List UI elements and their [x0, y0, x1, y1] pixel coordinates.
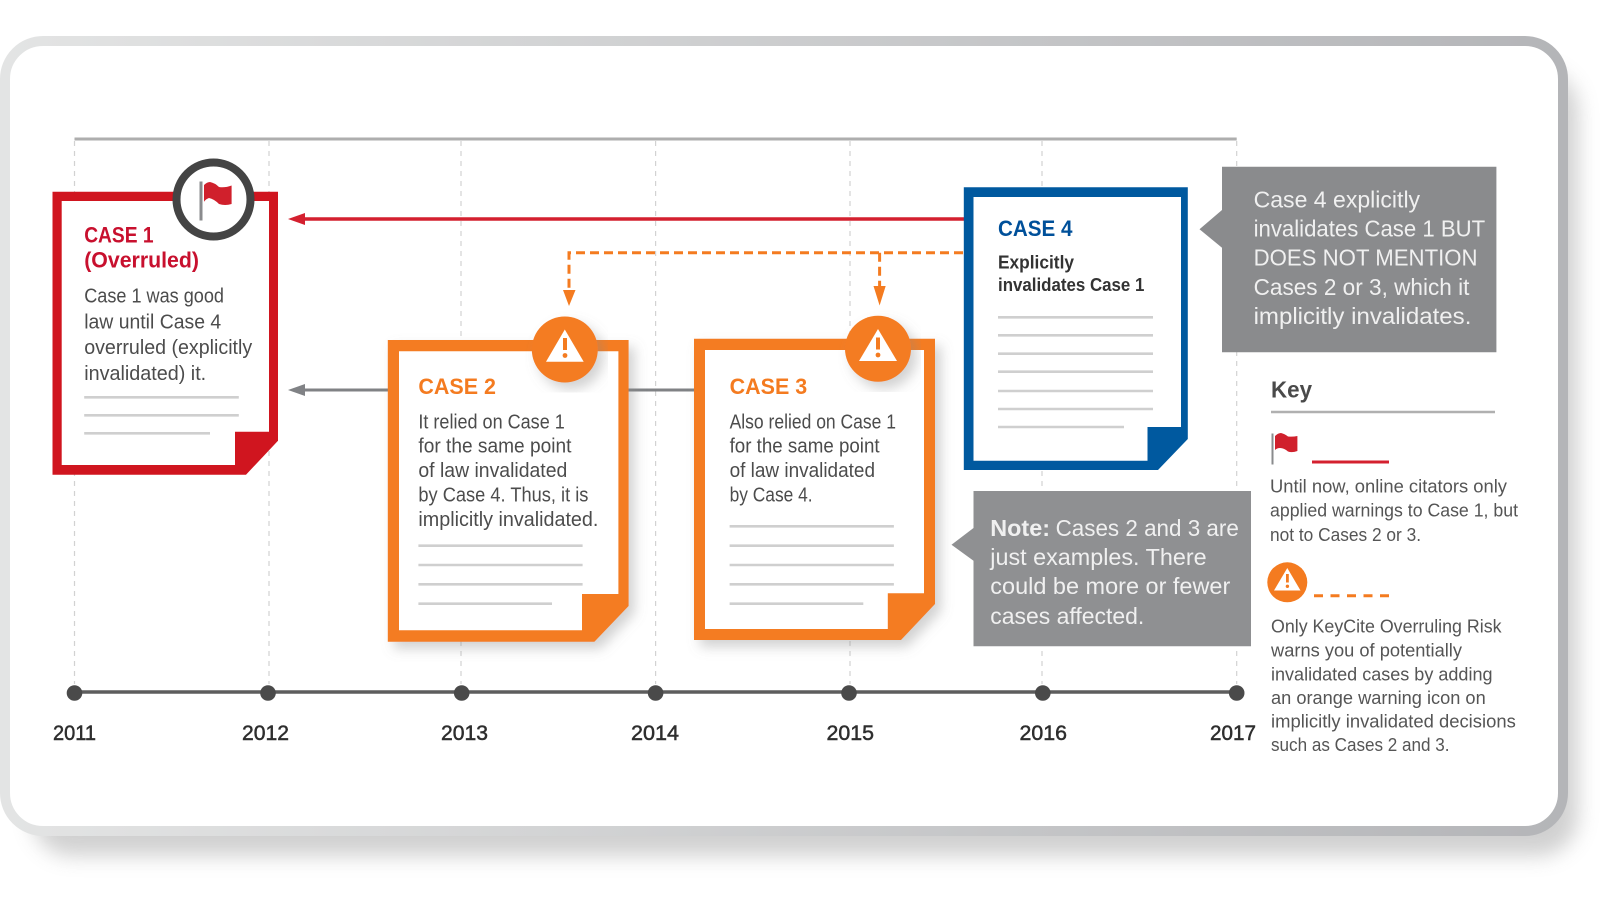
panel: Case 1 document	[52, 162, 278, 475]
year labels	[53, 722, 1256, 745]
callout: note on examples: could be more or fewer	[990, 573, 1231, 599]
panel: Case 3 document	[694, 316, 935, 640]
callout: Case 4 explanation: invalidates Case 1 BUT	[1254, 215, 1485, 241]
Case 1 title: (Overruled)	[84, 248, 199, 273]
key text: warning meaning: invalidated cases by adding	[1271, 663, 1492, 684]
Case 3 body text: Also relied on Case 1	[730, 411, 896, 433]
Case 3 body text: for the same point	[730, 436, 880, 458]
year labels: 2011	[53, 722, 96, 745]
callout: note on examples: Note:	[990, 515, 1050, 541]
callout: note on examples: Cases 2 and 3 are	[1056, 515, 1239, 541]
Case 1 title: CASE 1	[84, 223, 154, 248]
callout: Case 4 explanation: implicitly invalidates.	[1254, 303, 1471, 329]
icon: red flag in circle	[176, 162, 250, 236]
year labels: 2013	[441, 722, 488, 745]
callout: Case 4 explanation: DOES NOT MENTION	[1254, 245, 1478, 271]
arrow: dashed implicit invalidation	[563, 253, 963, 306]
year labels: 2017	[1210, 722, 1256, 745]
timeline axis	[67, 685, 1244, 701]
Case 2 body text: of law invalidated	[418, 460, 567, 482]
key icon: warning	[1267, 562, 1307, 602]
callout: note on examples: cases affected.	[990, 603, 1144, 629]
key text: flag meaning: not to Cases 2 or 3.	[1270, 524, 1421, 545]
callout: note on examples: just examples. There	[989, 544, 1207, 570]
Case 2 body text	[418, 411, 598, 531]
icon: warning on Case 3	[845, 316, 911, 382]
key text: warning meaning: Only KeyCite Overruling Risk	[1271, 616, 1502, 637]
year labels: 2012	[242, 722, 289, 745]
key text: warning meaning	[1270, 616, 1516, 755]
icon: warning on Case 2	[532, 316, 598, 382]
panel: Case 2 document	[388, 316, 629, 642]
Case 2 title: CASE 2	[418, 374, 496, 399]
Case 4 subtitle: Explicitly	[998, 252, 1074, 272]
key text: warning meaning: warns you of potentially	[1270, 639, 1463, 660]
Case 3 body text: by Case 4.	[730, 484, 813, 506]
callout: Case 4 explanation: Cases 2 or 3, which it	[1254, 274, 1470, 300]
Case 1 body text	[84, 286, 252, 385]
key text: warning meaning: implicitly invalidated decisions	[1271, 710, 1516, 731]
arrow: Case 2 and Case 3 rely on Case 1	[288, 384, 696, 396]
key text: flag meaning: Until now, online citators only	[1270, 476, 1508, 497]
Case 2 body text: implicitly invalidated.	[418, 509, 598, 531]
Case 1 body text: Case 1 was good	[84, 286, 224, 308]
arrow: Case 4 overrules Case 1	[288, 213, 966, 225]
Case 3 body text	[730, 411, 896, 506]
Case 2 body text: by Case 4. Thus, it is	[418, 484, 588, 506]
Case 1 body text: overruled (explicitly	[84, 337, 252, 359]
key icon: red flag	[1272, 433, 1297, 464]
key text: flag meaning: applied warnings to Case 1, but	[1270, 500, 1518, 521]
Case 3 body text: of law invalidated	[730, 460, 875, 482]
key text: flag meaning	[1270, 476, 1518, 545]
Case 2 body text: It relied on Case 1	[418, 411, 565, 433]
key text: warning meaning: such as Cases 2 and 3.	[1271, 734, 1450, 755]
Case 4 subtitle: invalidates Case 1	[998, 275, 1144, 295]
Case 4 title: CASE 4	[998, 216, 1073, 241]
panel: key	[1267, 377, 1518, 755]
callout: Case 4 explanation	[1200, 167, 1496, 352]
year labels: 2015	[826, 722, 874, 745]
key heading: Key	[1271, 377, 1312, 403]
callout: Case 4 explanation: Case 4 explicitly	[1254, 186, 1421, 212]
key text: warning meaning: an orange warning icon on	[1271, 687, 1486, 708]
year labels: 2014	[631, 722, 679, 745]
Case 2 body text: for the same point	[418, 436, 572, 458]
Case 3 title: CASE 3	[730, 374, 807, 399]
Case 1 body text: law until Case 4	[84, 312, 221, 334]
year labels: 2016	[1020, 722, 1067, 745]
Case 1 body text: invalidated) it.	[84, 363, 206, 385]
callout: note on examples	[952, 491, 1251, 646]
panel: Case 4 document	[964, 187, 1188, 470]
